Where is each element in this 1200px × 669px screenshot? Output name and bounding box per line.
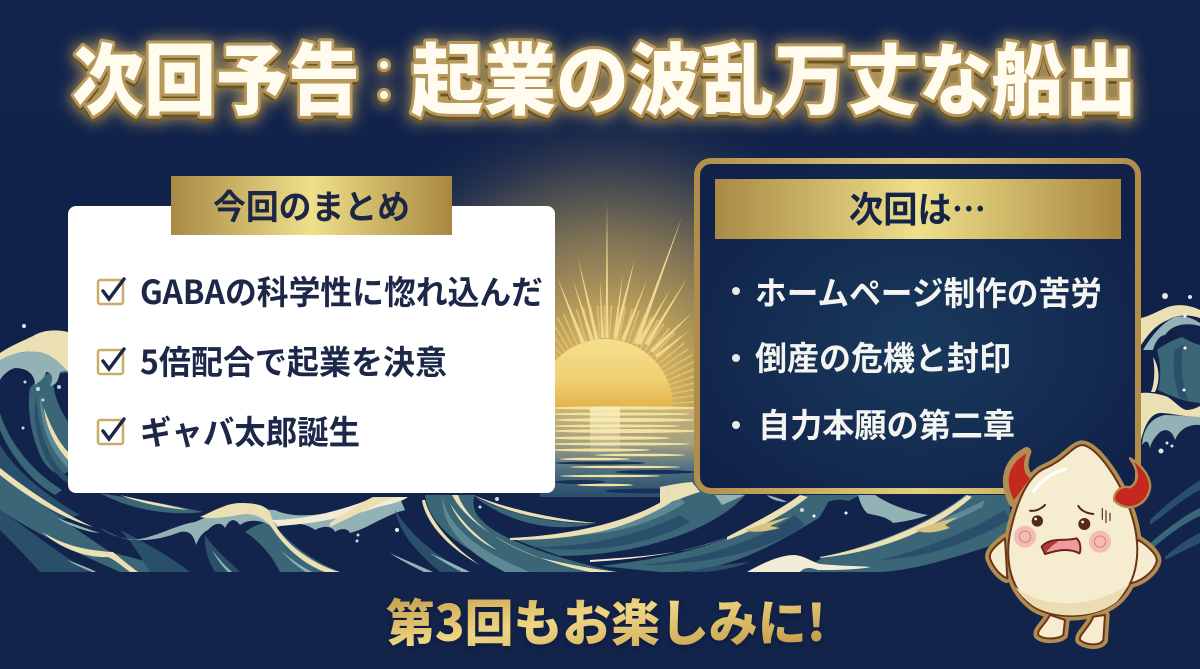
panel: next time [697, 161, 1138, 491]
sun [537, 339, 673, 407]
next item 2: 倒産の危機と封印 [755, 332, 1011, 380]
next item 3: 自力本願の第二章 [758, 399, 1015, 447]
mascot limbs [990, 538, 1157, 644]
wave: middle swell [510, 482, 745, 556]
heading ribbon: next time [715, 179, 1121, 239]
panel: this time's summary [68, 176, 555, 493]
wave: left big curl [0, 324, 80, 520]
mascot outer gold outline [990, 445, 1157, 644]
checklist item 2: 5倍配合で起業を決意 [140, 336, 447, 384]
panel card [68, 206, 555, 493]
panel frame [697, 161, 1138, 491]
checklist item 3: ギャバ太郎誕生 [140, 406, 360, 454]
wave: foam crest left [100, 497, 408, 572]
sea with sun reflection [0, 406, 1200, 577]
waves [0, 293, 1200, 573]
wave: lower left swells [0, 468, 203, 573]
heading ribbon: next time: 次回は… [849, 181, 986, 233]
mascot body [1008, 445, 1137, 616]
title: 起業の波乱万丈な船出 [411, 19, 1137, 131]
mascot left horn [1009, 453, 1030, 500]
title [72, 19, 1137, 131]
mascot body shading [1015, 584, 1129, 615]
mascot highlight [1033, 469, 1065, 492]
heading ribbon: summary [171, 176, 452, 235]
heading ribbon: summary: 今回のまとめ [213, 180, 410, 229]
title: 次回予告 [72, 19, 360, 131]
mascot right horn [1114, 458, 1150, 507]
wave: right big curl [1141, 293, 1200, 560]
mascot face [1014, 505, 1111, 554]
sunrise glow and rays [300, 100, 920, 491]
closing message: 第3回もお楽しみに! [386, 586, 826, 658]
closing message: 第3回もお楽しみに! [386, 584, 826, 656]
next item 1: ホームページ制作の苦労 [755, 267, 1102, 315]
checklist item 1: GABAの科学性に惚れ込んだ [140, 266, 543, 314]
wave: central swell [390, 495, 617, 572]
wave: right swell [590, 495, 1010, 572]
mascot: worried rice grain with red horns [990, 445, 1157, 644]
